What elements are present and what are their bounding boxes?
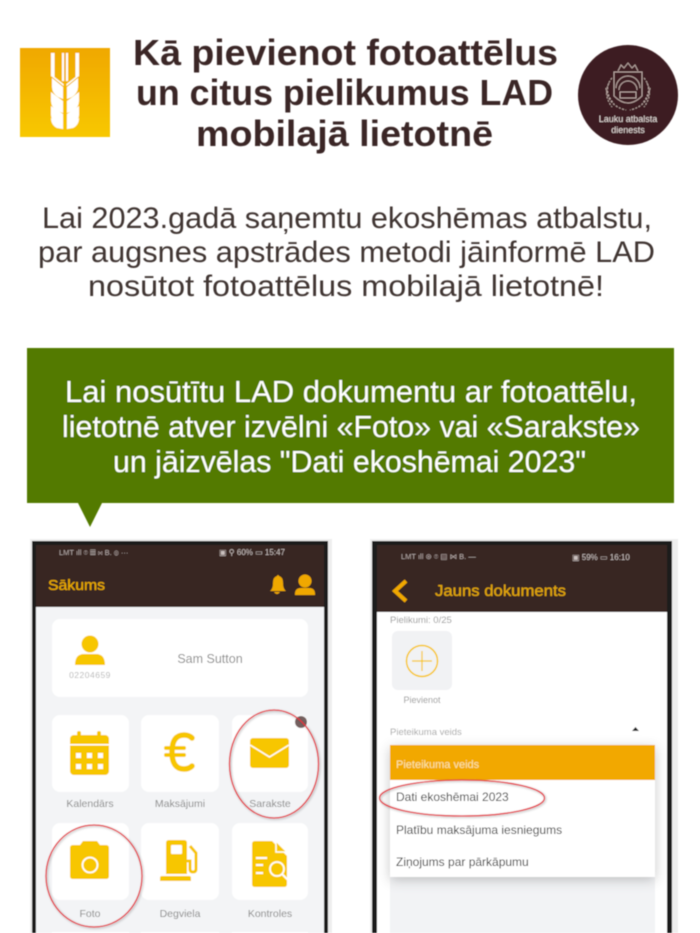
dropdown menu: Ziņojums par pārkāpumu (396, 855, 529, 869)
dropdown menu: Platību maksājuma iesniegums (396, 823, 562, 837)
tile: Foto (52, 823, 129, 920)
tile: Degviela: Degviela (160, 908, 201, 920)
app header (377, 545, 667, 612)
callout: green instruction box: un jāizvēlas "Dati ekoshēmai 2023" (113, 444, 586, 479)
user card: 02204659 (69, 670, 111, 680)
tile: Sarakste (232, 715, 308, 810)
text block: intro: nosūtot fotoattēlus mobilajā lietotnē! (88, 270, 604, 303)
app header: Sākums (48, 577, 105, 594)
tile: Maksājumi: Maksājumi (155, 798, 205, 810)
highlight: Foto ellipse (46, 825, 142, 927)
tile: Kalendārs (52, 715, 129, 810)
tile: Kontroles (232, 823, 308, 920)
dropdown menu: Dati ekoshēmai 2023 (396, 790, 509, 804)
callout: green instruction box: lietotnē atver izvēlni «Foto» vai «Sarakste» (62, 409, 640, 444)
tile: Kalendārs: Kalendārs (66, 798, 114, 810)
app header: LMT ıll ⌾ ▤ ⋈ B. ⊛ ··· (59, 548, 128, 557)
highlight: Sarakste ellipse (230, 710, 318, 818)
text block: intro: Lai 2023.gadā saņemtu ekoshēmas atbalstu, (42, 202, 652, 235)
heading: title: un citus pielikumus LAD (136, 72, 553, 113)
user card (52, 619, 308, 697)
tile: Foto: Foto (79, 908, 101, 920)
icon: wheat logo (20, 48, 110, 137)
app header: ▣ ⚲ 60% ▭ 15:47 (219, 548, 285, 557)
callout: green instruction box (27, 348, 674, 527)
app header (36, 541, 324, 607)
tile: Degviela (141, 823, 219, 920)
attachments: Pielikumi: 0/25 (390, 615, 452, 626)
heading: title (133, 32, 558, 154)
text block: intro: par augsnes apstrādes metodi jāinformē LAD (38, 236, 655, 269)
panel: phone new document screen (370, 539, 678, 933)
heading: title: mobilajā lietotnē (196, 113, 493, 154)
dropdown menu: Pieteikuma veids (396, 759, 480, 771)
select label: Pieteikuma veids (390, 727, 462, 738)
select label (390, 726, 640, 736)
text block: intro (38, 202, 655, 303)
tile: Maksājumi (141, 715, 219, 810)
icon: Lauku atbalsta dienests emblem (578, 45, 678, 145)
heading: title: Kā pievienot fotoattēlus (133, 32, 558, 73)
callout: green instruction box: Lai nosūtītu LAD dokumentu ar fotoattēlu, (65, 374, 637, 409)
panel: phone home screen (30, 539, 332, 933)
icon: Lauku atbalsta dienests emblem: dienests (611, 125, 645, 135)
app header: LMT ıll ⊛ ⌾ ▤ ⋈ B. — (401, 552, 476, 561)
tile: Sarakste: Sarakste (249, 798, 291, 810)
icon: Lauku atbalsta dienests emblem: Lauku atbalsta (599, 114, 657, 124)
highlight: Dati ekoshēmai ellipse (380, 780, 544, 816)
app header: ▣ 59% ▭ 16:10 (572, 553, 630, 562)
tile: Kontroles: Kontroles (248, 908, 292, 920)
user card: Sam Sutton (177, 652, 243, 666)
attachments: Pievienot (403, 695, 441, 705)
dropdown menu (390, 745, 655, 877)
app header: Jauns dokuments (435, 583, 566, 600)
attachments (390, 615, 452, 705)
